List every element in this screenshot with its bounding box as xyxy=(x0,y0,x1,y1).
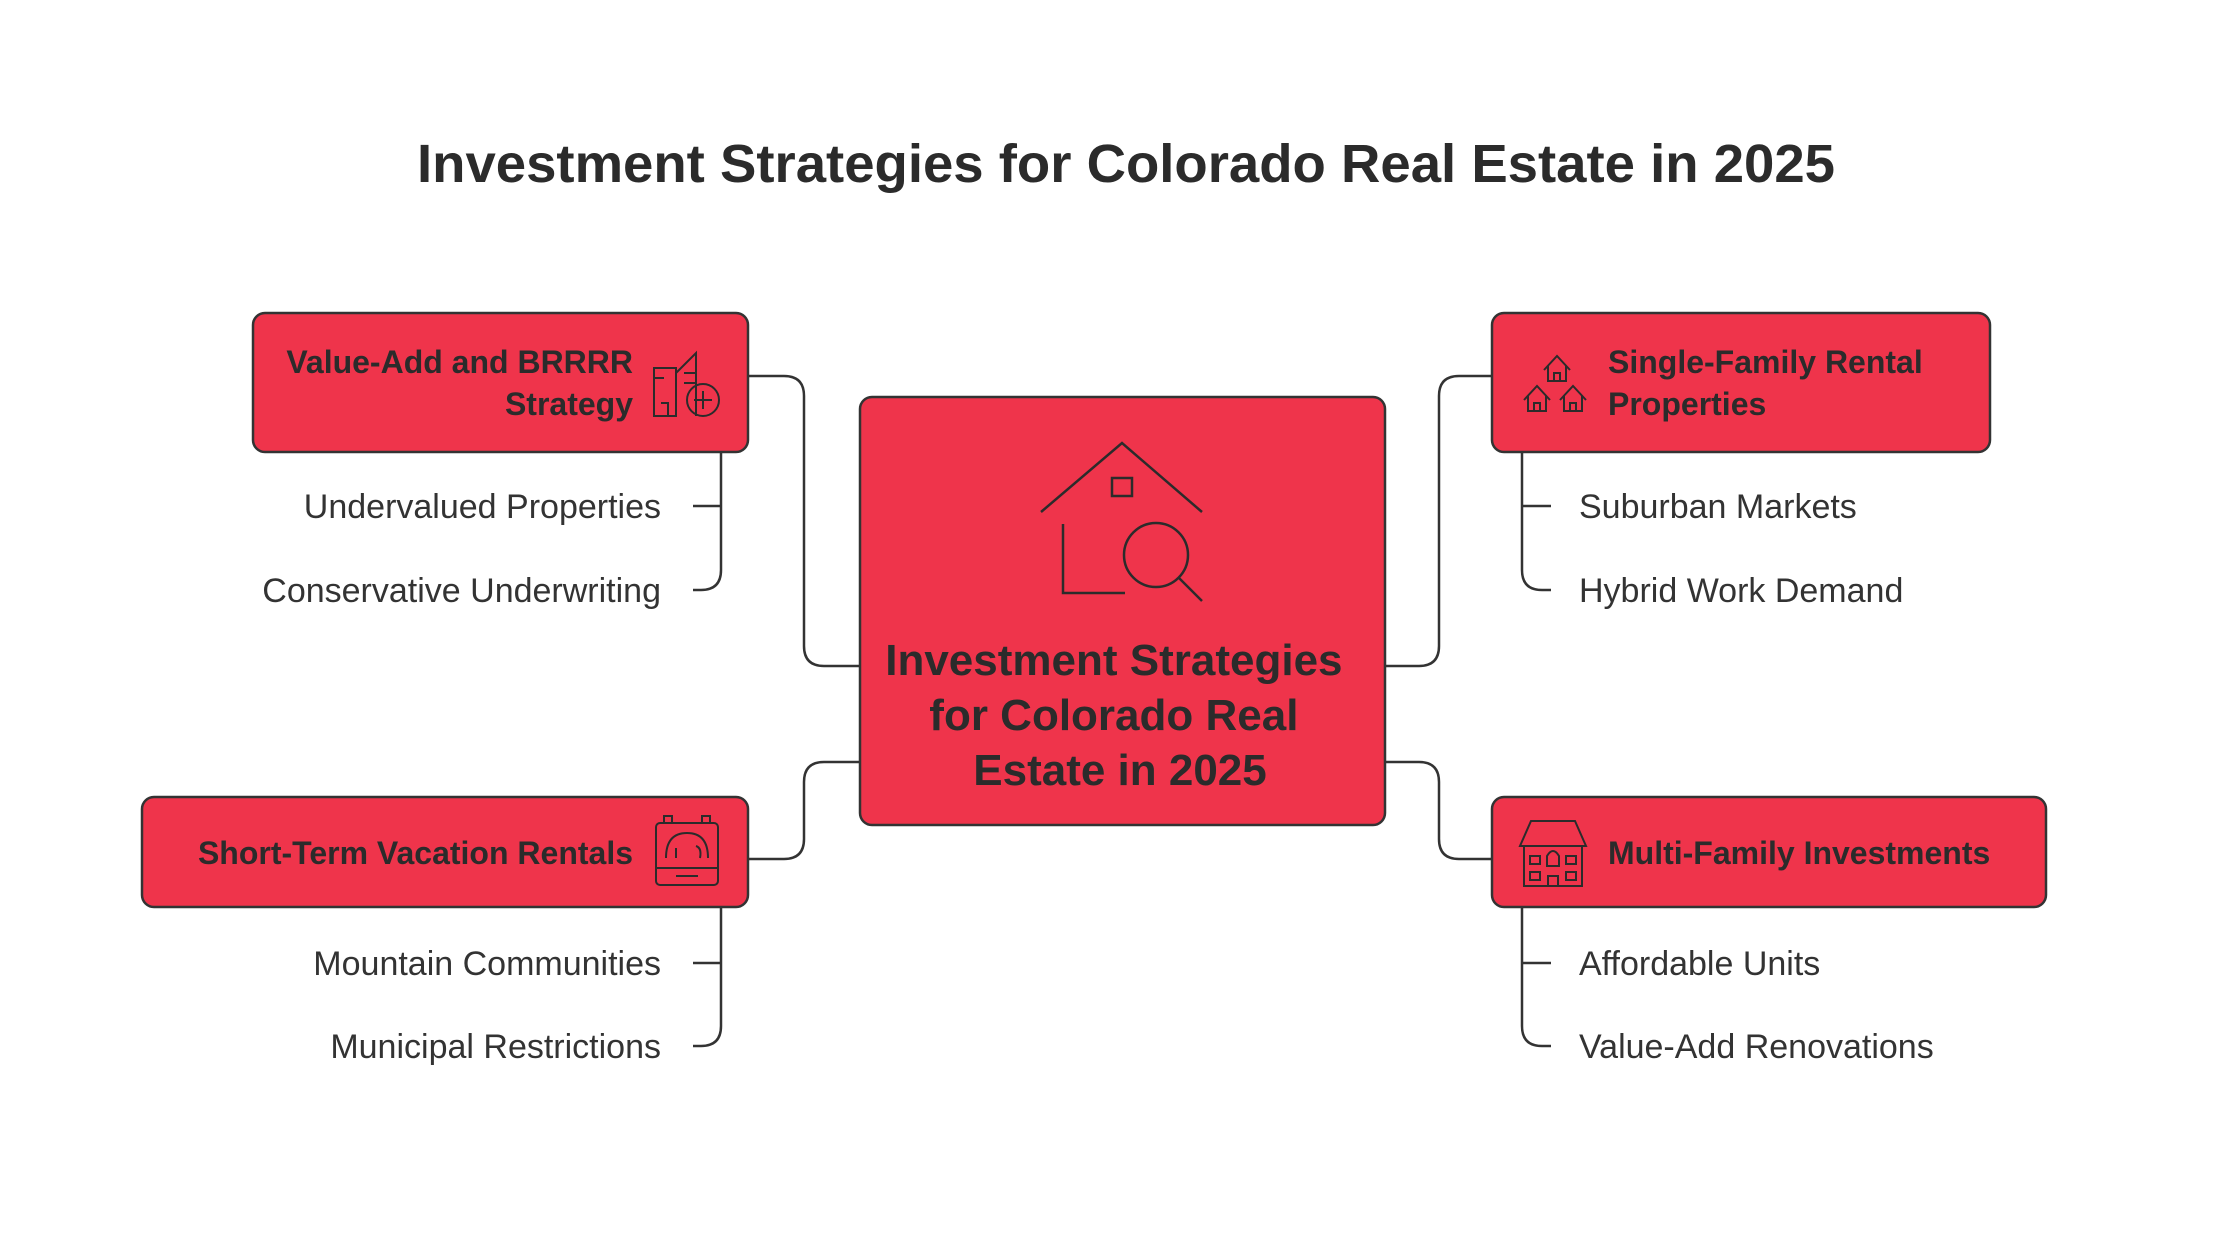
icon: house with magnifier xyxy=(1041,443,1202,601)
panel: multi-family investments xyxy=(1492,797,2046,907)
panel: single-family rentals: Properties xyxy=(1608,386,1766,422)
panel: short-term vacation rentals xyxy=(142,797,748,907)
connectors xyxy=(693,376,1551,1046)
panel: single-family rentals xyxy=(1492,313,1990,452)
panel: value-add and BRRRR: Strategy xyxy=(505,386,633,422)
icon: building plus xyxy=(654,353,719,416)
panel: single-family rentals: Single-Family Rental xyxy=(1608,344,1923,380)
panel: short-term vacation rentals: Short-Term Vacation Rentals xyxy=(198,835,633,871)
text: single-family items xyxy=(1579,488,1903,610)
text: vacation items: Municipal Restrictions xyxy=(330,1028,661,1066)
text: value-add items: Undervalued Properties xyxy=(304,488,661,526)
text: vacation items xyxy=(313,945,661,1066)
text: multi-family items: Value-Add Renovations xyxy=(1579,1028,1934,1066)
text: single-family items: Suburban Markets xyxy=(1579,488,1857,526)
text: value-add items xyxy=(262,488,661,610)
icon: three houses xyxy=(1524,356,1586,411)
text: vacation items: Mountain Communities xyxy=(313,945,661,983)
panel: value-add and BRRRR: Value-Add and BRRRR xyxy=(286,344,633,380)
text: multi-family items xyxy=(1579,945,1934,1066)
text: multi-family items: Affordable Units xyxy=(1579,945,1820,983)
text: single-family items: Hybrid Work Demand xyxy=(1579,572,1903,610)
central text: Estate in 2025 xyxy=(973,746,1267,795)
text: value-add items: Conservative Underwriting xyxy=(262,572,661,610)
panel: multi-family investments: Multi-Family Investments xyxy=(1608,835,1990,871)
panel: value-add and BRRRR xyxy=(253,313,748,452)
icon: apartment building xyxy=(1520,821,1586,886)
title: Investment Strategies for Colorado Real Estate in 2025 xyxy=(417,134,1835,194)
central text: Investment Strategies xyxy=(885,636,1343,685)
panel: central topic xyxy=(860,397,1385,825)
central text: for Colorado Real xyxy=(929,691,1298,740)
icon: suitcase globe xyxy=(656,816,718,885)
